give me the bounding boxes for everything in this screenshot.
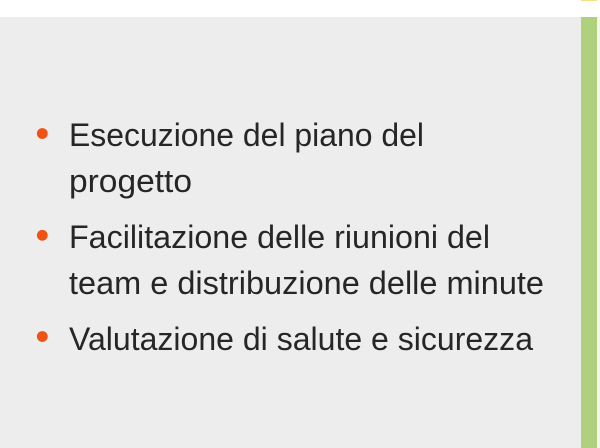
bullet item 1: Esecuzione del piano del — [69, 117, 424, 153]
bullet item 2 — [37, 219, 544, 301]
green side bar — [581, 17, 597, 448]
bullet item 2: team e distribuzione delle minute — [69, 265, 544, 301]
bullet item 3: Valutazione di salute e sicurezza — [69, 321, 533, 357]
bullet item 1: progetto — [69, 163, 192, 199]
bullet item 1 — [37, 117, 424, 199]
bullet list — [37, 117, 544, 357]
yellow top accent — [581, 0, 597, 1]
bullet item 2: Facilitazione delle riunioni del — [69, 219, 490, 255]
right edge strip — [597, 17, 600, 448]
